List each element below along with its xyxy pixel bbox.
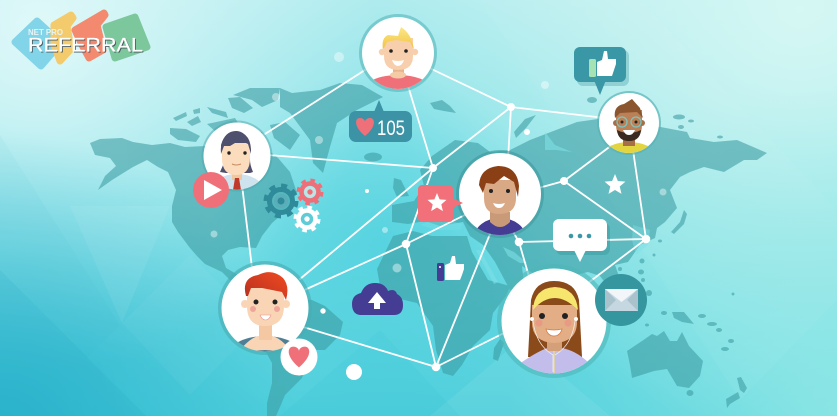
like count: 105: [377, 117, 405, 140]
callout: thumbs up bubble: [574, 47, 629, 95]
white gear: [296, 208, 318, 230]
logo: [15, 13, 147, 66]
avatar: brown-haired man: [456, 150, 544, 238]
floating dots: [210, 52, 666, 380]
Iceland: [364, 152, 382, 162]
Greenland: [280, 83, 383, 173]
icon: play button: [193, 172, 229, 208]
Eurasia: [392, 118, 767, 302]
red gear: [298, 180, 322, 204]
logo wordmark: REFERRAL: [28, 34, 143, 56]
icon: white star: [605, 174, 625, 194]
teal gear: [266, 186, 296, 216]
logo small text: NET PRO: [28, 28, 63, 37]
inland seas: [420, 132, 650, 284]
Svalbard and Novaya Zemlya: [430, 100, 536, 138]
callout: star bubble: [418, 185, 463, 222]
Australia: [627, 331, 703, 388]
logo colour tiles: [15, 13, 147, 66]
avatar: woman with yellow headband: [497, 264, 611, 380]
icon: cloud upload: [352, 283, 403, 315]
icon: purple thumbs up: [437, 256, 464, 281]
heart icon: [356, 118, 374, 136]
Africa: [377, 231, 510, 376]
avatar: blond man: [359, 14, 437, 92]
logo text shadow: REFERRAL: [29, 36, 144, 58]
icon: heart badge: [280, 338, 318, 376]
avatar: red-haired boy: [218, 261, 312, 355]
South America: [262, 296, 343, 416]
North America: [90, 130, 297, 302]
icon: gears: [266, 180, 322, 230]
Arctic islands: [170, 88, 300, 150]
Madagascar: [493, 339, 504, 361]
network nodes: [402, 103, 650, 371]
Oceania and Asian islands: [671, 210, 747, 408]
world map: [90, 83, 767, 416]
avatar: dark-haired man in tie: [202, 120, 272, 192]
British Isles: [393, 178, 409, 197]
icon: mail: [595, 274, 647, 326]
avatar: man with glasses: [597, 91, 661, 155]
callout: chat bubble: [553, 219, 610, 262]
network connection lines: [242, 53, 646, 367]
callout: heart count 105: [349, 100, 412, 142]
